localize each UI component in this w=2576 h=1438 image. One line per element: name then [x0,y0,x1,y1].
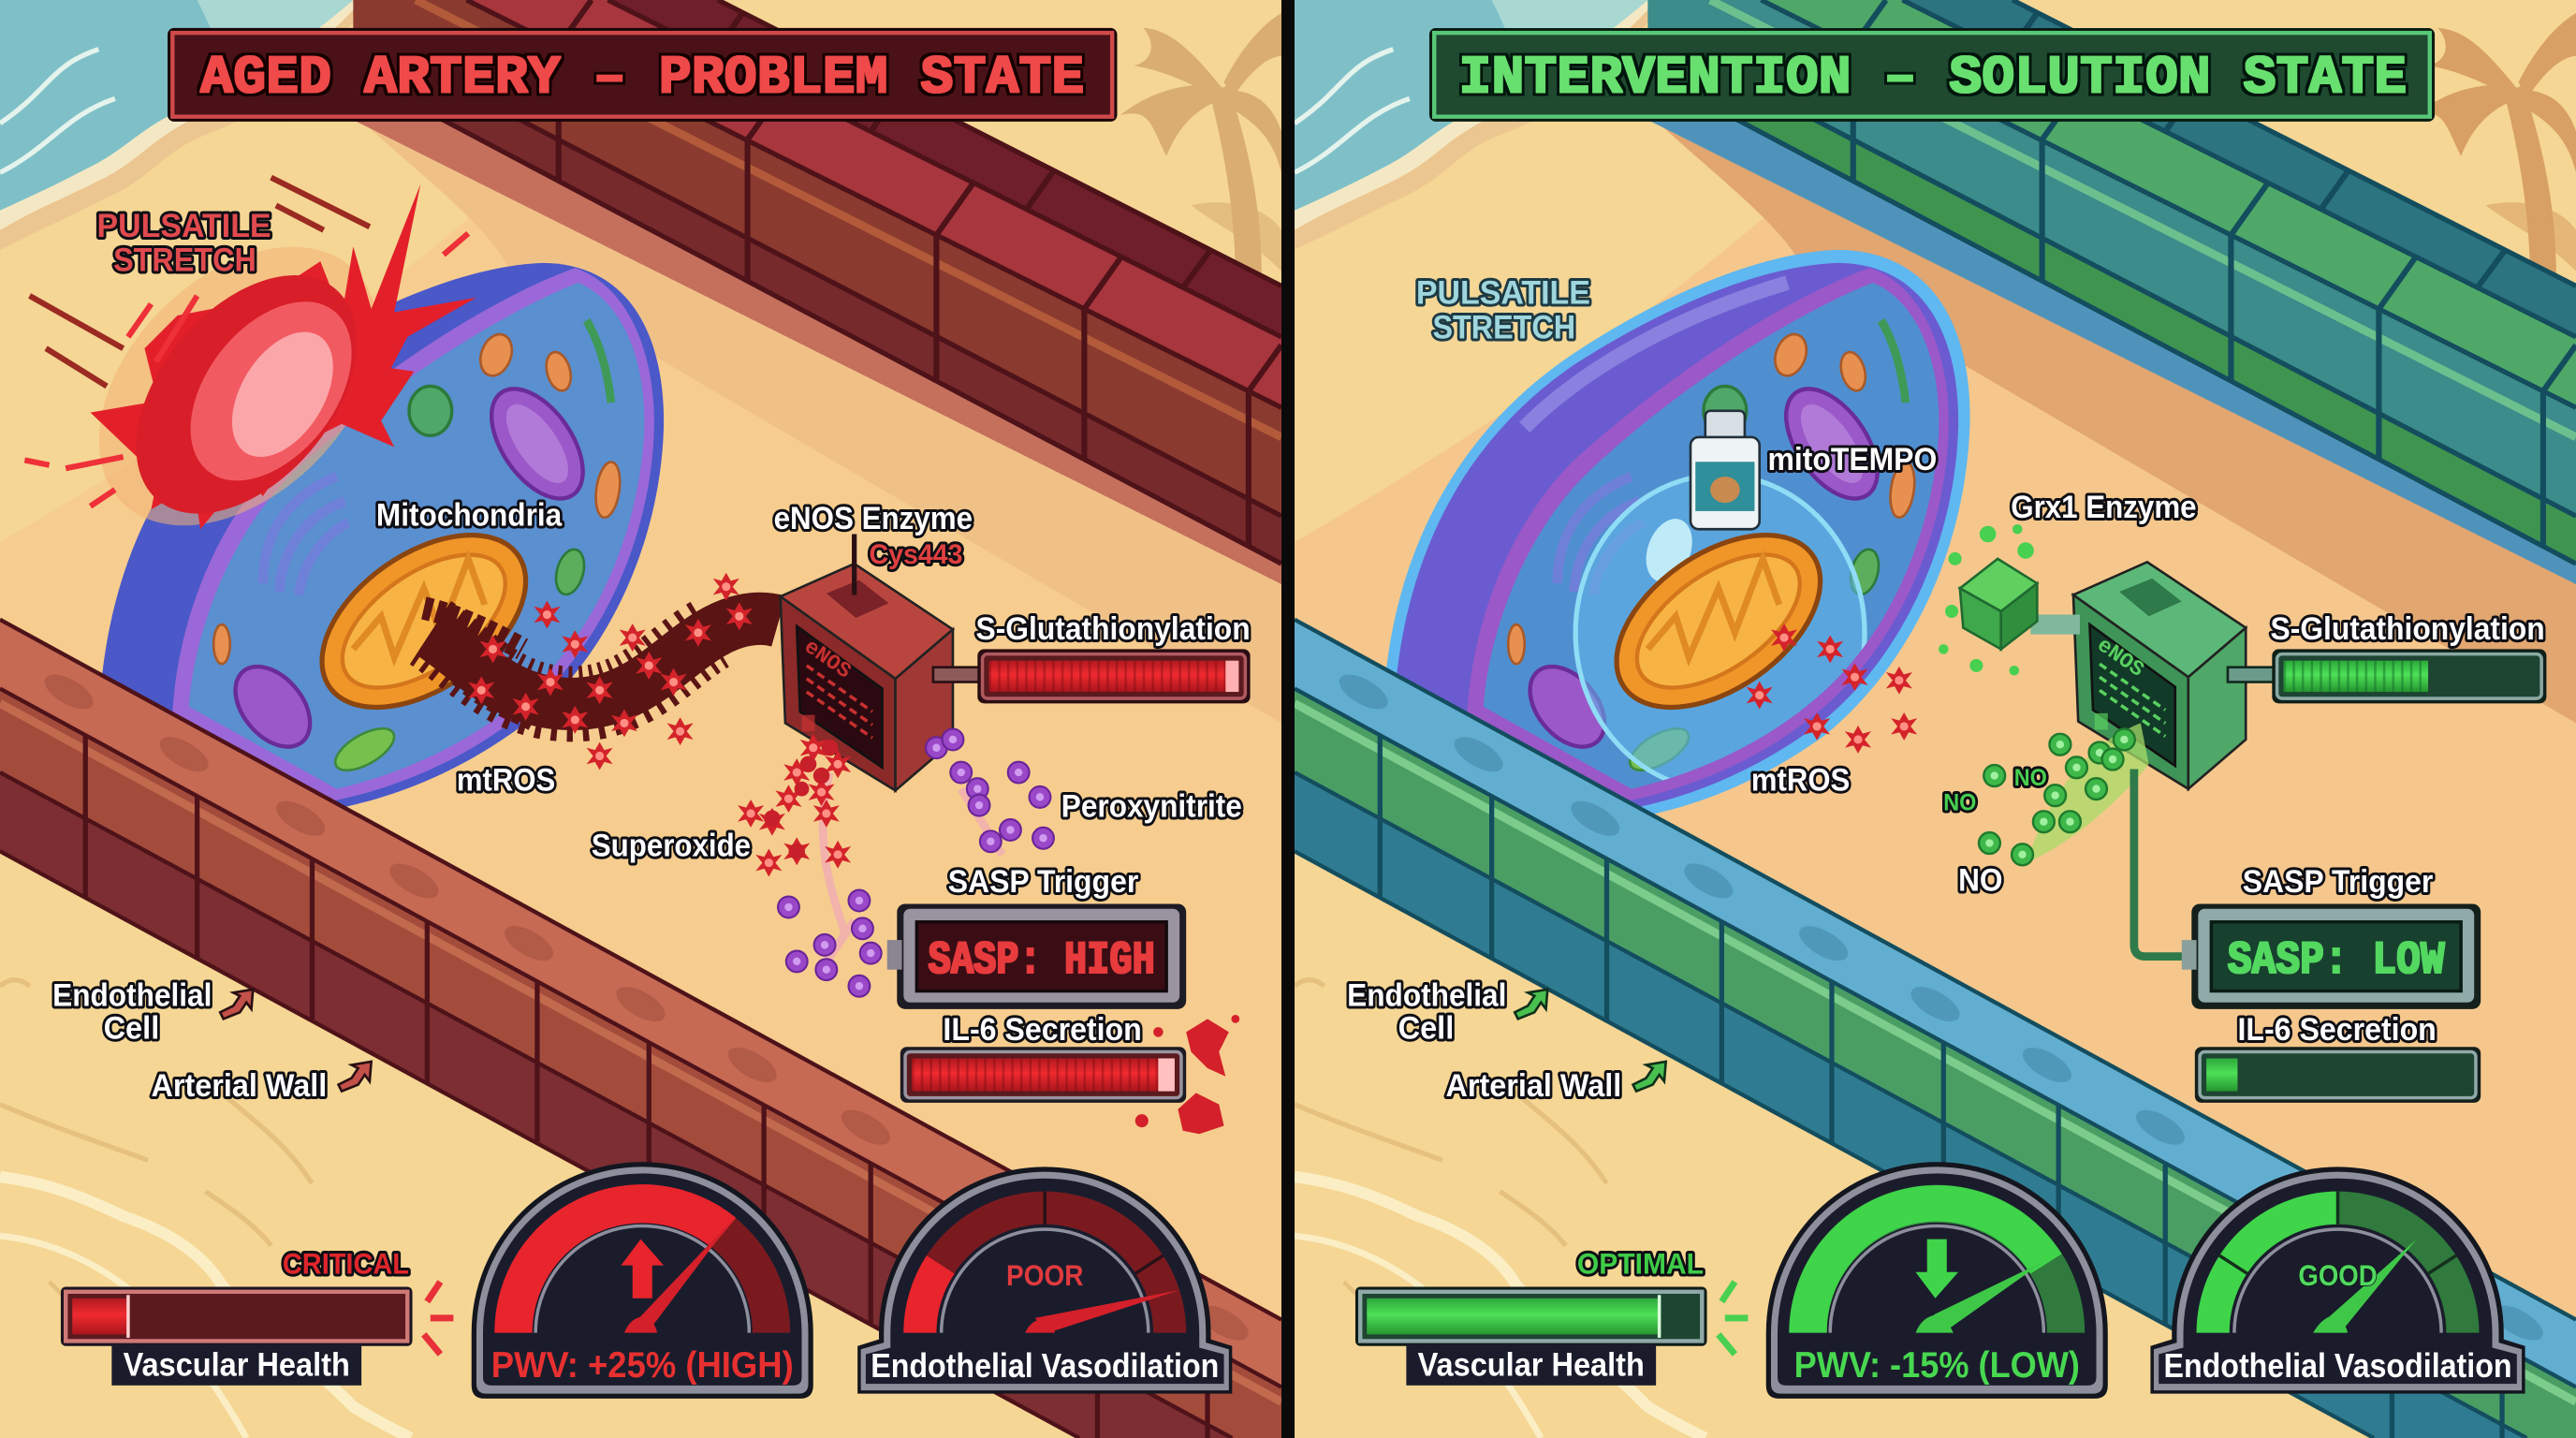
mitoTEMPO bottle [1690,393,1760,529]
title banner: intervention: INTERVENTION – SOLUTION STATE [1459,48,2407,109]
endothelial cell [102,263,664,809]
label: Peroxynitrite: Peroxynitrite [1061,788,1242,824]
label: Endothelial Cell: Endothelial [52,977,212,1013]
eNOS enzyme device [781,535,953,790]
gauge: endothelial vasodilation good [2150,1167,2525,1394]
gauge: endothelial vasodilation poor: Endothelial Vasodilation [871,1346,1219,1385]
S-Glutathionylation bar [933,649,1251,703]
title banner: aged artery [168,28,1117,122]
gauge: endothelial vasodilation good: GOOD [2298,1258,2378,1292]
gauge: PWV low: PWV: -15% (LOW) [1794,1345,2080,1386]
label: Vascular Health: Vascular Health [1418,1346,1645,1383]
label: IL-6 Secretion: IL-6 Secretion [2237,1012,2437,1048]
label: Pulsatile Stretch: PULSATILE [97,208,271,244]
label: Mitochondria: Mitochondria [376,498,563,534]
beach background [0,0,1281,1438]
label: Arterial Wall: Arterial Wall [1445,1068,1621,1104]
title banner: aged artery: AGED ARTERY – PROBLEM STATE [200,48,1084,109]
label: Pulsatile Stretch: STRETCH [113,242,256,279]
label: Pulsatile Stretch: PULSATILE [1416,275,1590,312]
arrow: endothelial cell pointer [220,990,253,1019]
panel: intervention solution state [1295,0,2576,1438]
SASP status display: SASP: HIGH [929,934,1155,987]
label: mtROS: mtROS [457,762,555,798]
label: Vascular Health: Vascular Health [124,1346,350,1383]
gauge: PWV low [1766,1162,2108,1399]
label: Grx1 Enzyme: Grx1 Enzyme [2011,490,2197,525]
Grx1 enzyme [1939,524,2080,675]
lower artery wall [0,620,1281,1438]
upper artery wall [1647,0,2576,584]
SASP status display [887,903,1186,1009]
pipe to SASP display [2134,770,2195,957]
label: Arterial Wall: Arterial Wall [151,1068,327,1104]
center divider [1281,0,1295,1438]
arrow: arterial wall pointer [339,1062,372,1092]
label: NO tag one: NO [1943,790,1976,815]
mtROS sparks reduced [1747,624,1917,754]
lower artery wall [1295,620,2576,1438]
beach background [1295,0,2576,1438]
gauge: endothelial vasodilation poor [857,1167,1232,1394]
upper artery wall [353,0,1281,584]
gauge: PWV high [472,1162,813,1399]
gauge: PWV high: PWV: +25% (HIGH) [491,1345,794,1386]
label: S-Glutathionylation: S-Glutathionylation [2271,611,2545,647]
eNOS enzyme device restored [2073,562,2246,789]
label: NO tag two: NO [2014,766,2047,791]
label: Pulsatile Stretch: STRETCH [1432,310,1575,346]
pulsatile stretch burst [24,178,476,580]
IL-6 secretion bar [900,1047,1186,1103]
S-Glutathionylation bar [2228,649,2546,703]
gauge: endothelial vasodilation poor: POOR [1006,1258,1084,1292]
label: SASP Trigger: SASP Trigger [2243,864,2433,900]
label: IL-6 Secretion: IL-6 Secretion [943,1012,1142,1048]
label: mtROS: mtROS [1751,762,1850,798]
label: Endothelial Cell: Endothelial [1347,977,1506,1013]
mtROS stream [424,573,779,770]
vascular health bar optimal [1355,1282,1748,1354]
label: Superoxide: Superoxide [592,829,751,864]
label: S-Glutathionylation: S-Glutathionylation [976,611,1251,647]
label: Optimal: OPTIMAL [1577,1246,1704,1280]
panel: aged artery problem state [0,0,1281,1438]
gauge: endothelial vasodilation good: Endothelial Vasodilation [2163,1346,2512,1385]
SASP status display: SASP: LOW [2228,934,2445,987]
nitric oxide particles [1979,723,2149,865]
IL-6 splatter [1135,1015,1239,1134]
arrow: endothelial cell pointer [1515,990,1547,1019]
SASP status display [2182,903,2481,1009]
IL-6 secretion bar [2195,1047,2481,1103]
label: Cys443: Cys443 [869,539,962,570]
label: Endothelial Cell: Cell [104,1010,159,1046]
superoxide and peroxynitrite particles [738,729,1054,997]
vascular health bar critical [61,1282,453,1354]
label: eNOS Enzyme: eNOS Enzyme [774,501,973,536]
title banner: intervention [1429,28,2435,122]
label: Critical: CRITICAL [283,1246,409,1280]
label: SASP Trigger: SASP Trigger [948,864,1138,900]
arrow: arterial wall pointer [1633,1062,1666,1092]
label: mitoTEMPO: mitoTEMPO [1767,442,1937,477]
label: NO: NO [1958,862,2002,898]
endothelial cell with protective glow [1385,250,1970,818]
label: Endothelial Cell: Cell [1398,1010,1454,1046]
